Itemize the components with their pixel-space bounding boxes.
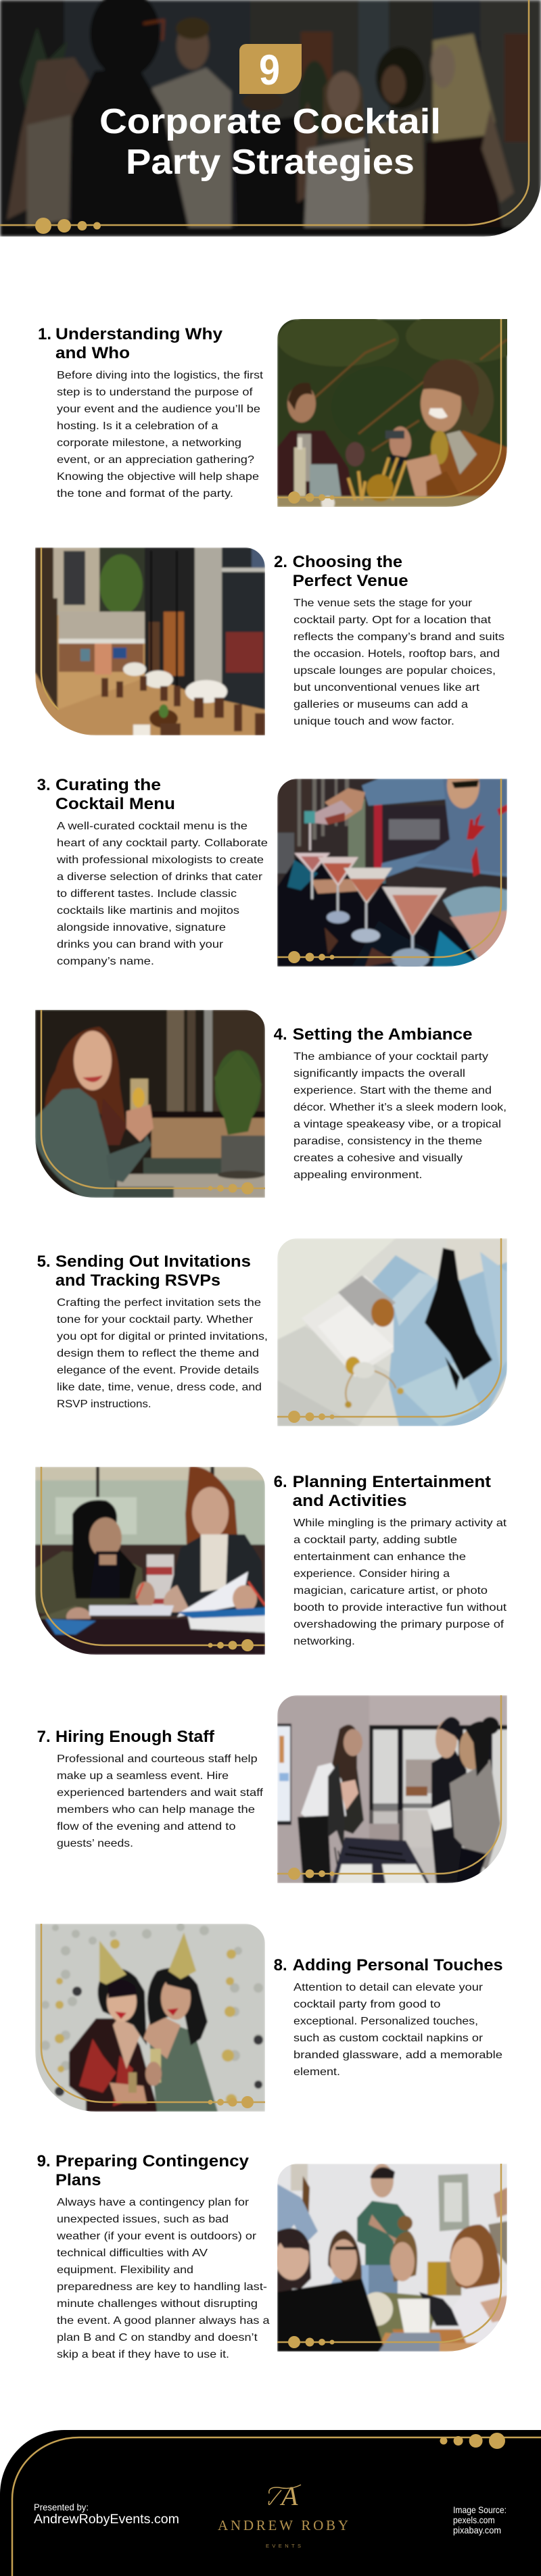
heading 5: Sending Out Invitations — [55, 1253, 251, 1271]
image sources — [453, 2504, 507, 2535]
panel: step 7 — [37, 1695, 507, 1883]
body text 4 — [293, 1051, 507, 1181]
body text 2: unique touch and wow factor. — [293, 716, 454, 727]
body text 9: the event. A good planner always has a — [57, 2315, 270, 2327]
number badge — [239, 44, 302, 94]
logo monogram: A — [279, 2481, 298, 2511]
body text 3 — [56, 821, 268, 967]
body text 9: technical difficulties with AV — [57, 2247, 208, 2259]
logo wordmark: ANDREW ROBY — [218, 2517, 348, 2533]
photo 9: team around a laptop — [275, 2164, 507, 2352]
body text 6: entertainment can enhance the — [293, 1551, 466, 1563]
body text 2: upscale lounges are popular choices, — [293, 665, 496, 677]
heading 2: Choosing the — [293, 553, 402, 571]
header photo: party guests, darkened — [0, 0, 541, 237]
panel: step 1 — [39, 319, 507, 507]
body text 4: experience. Start with the theme and — [293, 1085, 492, 1096]
presented by: Presented by: — [34, 2502, 89, 2512]
photo 5: invitation and feathers — [277, 1238, 507, 1426]
body text 4: appealing environment. — [293, 1169, 422, 1181]
panel: step 9 — [37, 2152, 507, 2360]
body text 4: The ambiance of your cocktail party — [293, 1051, 488, 1063]
heading 4: Setting the Ambiance — [293, 1025, 473, 1044]
body text 4: significantly impacts the overall — [293, 1068, 465, 1079]
photo 4: woman with drink — [35, 1010, 265, 1198]
footer gold line with dots — [12, 2433, 541, 2576]
gold line with dots — [41, 1924, 265, 2108]
body text 5: RSVP instructions. — [57, 1399, 151, 1410]
body text 3: alongside innovative, signature — [57, 922, 226, 933]
body text 9: Always have a contingency plan for — [57, 2197, 250, 2208]
heading 6: Planning Entertainment — [293, 1473, 491, 1491]
title: Corporate Cocktail — [99, 102, 441, 141]
body text 3: A well-curated cocktail menu is the — [57, 821, 248, 832]
gold border line with dots — [0, 0, 529, 234]
panel: step 4 — [35, 1010, 507, 1198]
body text 7: members who can help manage the — [57, 1804, 255, 1816]
body text 6: networking. — [293, 1636, 355, 1647]
panel: step 5 — [37, 1238, 507, 1426]
gold line with dots — [277, 1238, 501, 1423]
heading 8: 8. — [274, 1956, 287, 1974]
body text 5: like date, time, venue, dress code, and — [57, 1382, 262, 1393]
panel: step 6 — [35, 1467, 507, 1655]
body text 2: reflects the company’s brand and suits — [293, 631, 504, 643]
body text 8: cocktail party from good to — [293, 1999, 441, 2010]
body text 9: equipment. Flexibility and — [57, 2264, 193, 2276]
photo 2: venue interior — [35, 548, 265, 735]
heading 7: Hiring Enough Staff — [55, 1728, 215, 1746]
body text 6: a cocktail party, adding subtle — [293, 1534, 457, 1546]
body text 1: hosting. Is it a celebration of a — [57, 420, 218, 432]
body text 6: overshadowing the primary purpose of — [293, 1619, 504, 1630]
body text 9: minute challenges without disrupting — [57, 2298, 258, 2310]
body text 6: magician, caricature artist, or photo — [293, 1585, 488, 1597]
body text 9: skip a beat if they have to use it. — [57, 2349, 229, 2360]
image sources: pexels.com — [453, 2514, 495, 2525]
gold line with dots — [277, 779, 501, 963]
heading 9: Preparing Contingency — [55, 2152, 250, 2170]
body text 3: a diverse selection of drinks that cater — [57, 871, 263, 883]
heading 5: 5. — [37, 1253, 51, 1271]
body text 9: plan B and C on standby and doesn’t — [57, 2332, 258, 2343]
body text 2: The venue sets the stage for your — [293, 598, 473, 609]
panel: step 8 — [35, 1923, 503, 2112]
body text 8 — [293, 1982, 502, 2078]
photo 7: staff at event check-in — [277, 1695, 507, 1883]
body text 3: drinks you can brand with your — [57, 939, 224, 950]
body text 8: Attention to detail can elevate your — [293, 1982, 484, 1993]
photo 8: two women in party hats — [35, 1923, 265, 2112]
logo monogram — [268, 2481, 301, 2511]
body text 6: While mingling is the primary activity at — [293, 1517, 507, 1529]
body text 9: weather (if your event is outdoors) or — [56, 2231, 257, 2242]
heading 7: 7. — [37, 1728, 51, 1746]
heading 8: Adding Personal Touches — [293, 1956, 503, 1974]
body text 3: company’s name. — [57, 956, 154, 967]
body text 4: a vintage speakeasy vibe, or a tropical — [293, 1119, 501, 1130]
body text 7: flow of the evening and attend to — [57, 1821, 236, 1832]
body text 4: creates a cohesive and visually — [293, 1152, 463, 1164]
gold line — [41, 548, 59, 710]
heading 2: Perfect Venue — [293, 572, 408, 590]
logo: Andrew Roby Events — [218, 2481, 348, 2549]
heading 1: Understanding Why — [55, 325, 223, 343]
photo 1: outdoor dinner — [277, 319, 507, 507]
body text 9: preparedness are key to handling last- — [57, 2281, 267, 2293]
footer — [0, 2430, 541, 2576]
presented by — [34, 2502, 179, 2527]
heading 2: 2. — [274, 553, 287, 571]
body text 7 — [57, 1753, 264, 1849]
gold line with dots — [41, 1467, 265, 1651]
body text 5: tone for your cocktail party. Whether — [57, 1314, 254, 1326]
body text 7: make up a seamless event. Hire — [57, 1770, 229, 1782]
photo 3: bartender pouring cocktails — [277, 762, 507, 969]
body text 1: your event and the audience you’ll be — [57, 404, 260, 415]
title: Party Strategies — [126, 143, 415, 182]
heading 9: Plans — [55, 2171, 101, 2189]
body text 9: unexpected issues, such as bad — [57, 2214, 229, 2225]
heading 1: 1. — [38, 325, 51, 343]
heading 9: 9. — [37, 2152, 51, 2170]
gold line with dots — [277, 2164, 501, 2348]
body text 3: cocktails like martinis and mojitos — [57, 905, 239, 917]
body text 5: elegance of the event. Provide details — [57, 1365, 259, 1376]
body text 5 — [57, 1297, 268, 1410]
heading 3: Cocktail Menu — [55, 795, 175, 813]
heading 6: 6. — [274, 1473, 287, 1491]
heading 6 — [274, 1473, 491, 1510]
body text 6: experience. Consider hiring a — [293, 1568, 450, 1580]
heading 3: Curating the — [55, 776, 161, 794]
body text 3: with professional mixologists to create — [56, 854, 264, 866]
number badge: 9 — [259, 47, 280, 94]
body text 1: Knowing the objective will help shape — [57, 471, 259, 483]
gold line with dots — [277, 1695, 501, 1880]
body text 3: to different tastes. Include classic — [57, 888, 237, 900]
body text 2: the occasion. Hotels, rooftop bars, and — [293, 648, 500, 660]
photo 6: two women reviewing papers — [35, 1467, 265, 1655]
body text 8: element. — [293, 2066, 340, 2078]
body text 2 — [293, 598, 504, 727]
body text 5: design them to reflect the theme and — [57, 1348, 259, 1359]
image sources: pixabay.com — [453, 2525, 501, 2535]
body text 1: the tone and format of the party. — [57, 488, 233, 500]
heading 1: and Who — [55, 344, 130, 362]
body text 5: Crafting the perfect invitation sets the — [57, 1297, 261, 1309]
body text 2: but unconventional venues like art — [293, 682, 480, 694]
body text 1 — [57, 370, 264, 500]
image sources: Image Source: — [453, 2504, 507, 2515]
body text 8: exceptional. Personalized touches, — [293, 2016, 478, 2027]
panel: step 3 — [37, 762, 507, 969]
header banner — [0, 0, 541, 237]
body text 8: branded glassware, add a memorable — [293, 2049, 502, 2061]
body text 7: experienced bartenders and wait staff — [57, 1787, 264, 1799]
body text 8: such as custom cocktail napkins or — [293, 2033, 484, 2044]
body text 6: booth to provide interactive fun without — [293, 1602, 507, 1613]
title — [99, 102, 441, 182]
presented by: AndrewRobyEvents.com — [34, 2512, 179, 2527]
heading 2 — [274, 553, 408, 590]
body text 4: paradise, consistency in the theme — [293, 1136, 482, 1147]
heading 4: 4. — [274, 1025, 287, 1044]
heading 3: 3. — [37, 776, 51, 794]
heading 5 — [37, 1253, 251, 1290]
heading 1 — [38, 325, 223, 362]
body text 5: you opt for digital or printed invitations, — [57, 1331, 268, 1342]
footer background — [0, 2430, 541, 2576]
body text 1: corporate milestone, a networking — [57, 437, 241, 449]
heading 9 — [37, 2152, 250, 2189]
body text 6 — [293, 1517, 507, 1647]
body text 1: Before diving into the logistics, the first — [57, 370, 264, 381]
body text 1: event, or an appreciation gathering? — [57, 454, 254, 466]
body text 2: galleries or museums can add a — [293, 699, 468, 710]
body text 3: heart of any cocktail party. Collaborate — [57, 837, 268, 849]
gold line with dots — [41, 1010, 265, 1194]
panel: step 2 — [35, 548, 504, 735]
heading 5: and Tracking RSVPs — [55, 1271, 220, 1290]
body text 7: guests’ needs. — [57, 1838, 133, 1849]
heading 3 — [37, 776, 175, 813]
body text 7: Professional and courteous staff help — [57, 1753, 258, 1765]
body text 1: step is to understand the purpose of — [57, 387, 253, 398]
logo tagline: EVENTS — [266, 2543, 301, 2549]
body text 9 — [56, 2197, 270, 2360]
heading 6: and Activities — [293, 1492, 407, 1510]
gold line with dots — [277, 319, 501, 504]
body text 4: décor. Whether it’s a sleek modern look, — [293, 1102, 507, 1113]
body text 2: cocktail party. Opt for a location that — [293, 614, 492, 626]
